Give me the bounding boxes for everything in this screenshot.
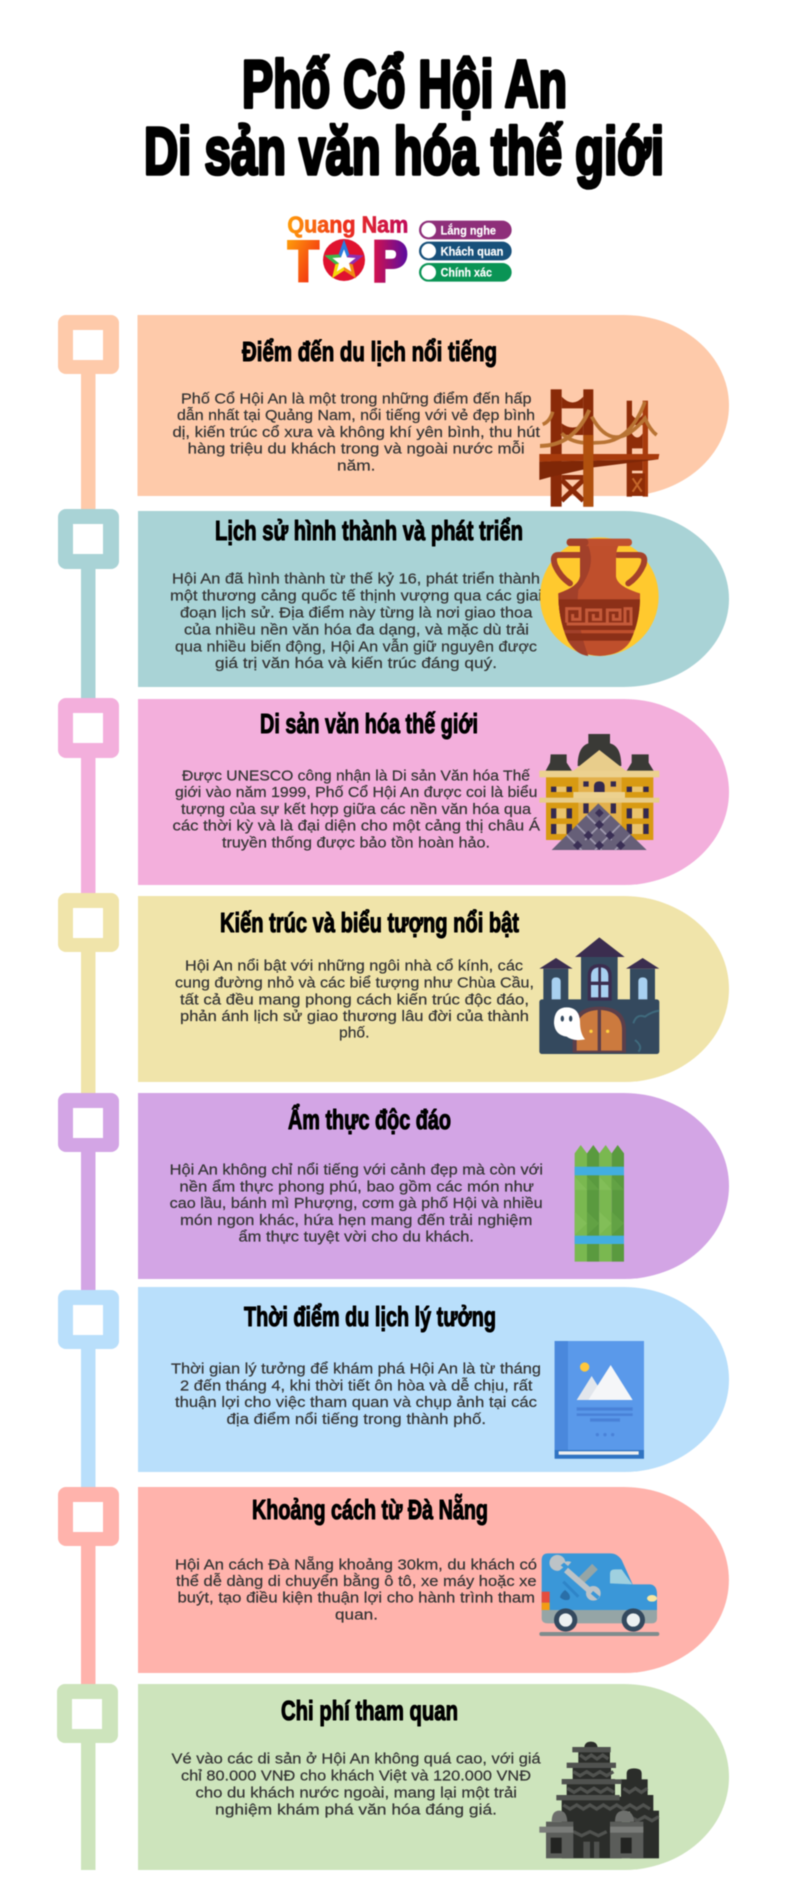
timeline node 4 <box>58 893 119 1096</box>
text block: dẫn nhất tại Quảng Nam, nổi tiếng với vẻ đẹp bình <box>177 407 535 424</box>
logo: Quang Nam TOP: Quang Nam <box>287 211 408 237</box>
panel: di sản văn hóa thế giới <box>138 699 729 885</box>
text block: qua nhiều biến động, Hội An vẫn giữ nguyên được <box>175 638 538 655</box>
text block: Thời gian lý tưởng để khám phá Hội An là từ tháng <box>171 1360 541 1377</box>
card background <box>138 896 729 1082</box>
text block: địa điểm nổi tiếng trong thành phố. <box>226 1411 486 1428</box>
text block: phản ánh lịch sử giao thương lâu đời của thành <box>180 1008 529 1025</box>
logo: Quang Nam TOP: Khách quan <box>441 244 503 258</box>
card background <box>138 315 729 496</box>
text block: Hội An nổi bật với những ngôi nhà cổ kính, các <box>185 958 524 975</box>
title: Phố Cổ Hội An <box>242 47 567 122</box>
icon: picture book <box>555 1341 644 1459</box>
text block <box>172 767 540 852</box>
heading: Ẩm thực độc đáo <box>288 1104 451 1135</box>
text block: cho du khách nước ngoài, mang lại một trải <box>196 1784 517 1801</box>
panel: chi phí tham quan <box>138 1684 729 1870</box>
text block: Vé vào các di sản ở Hội An không quá cao, với giá <box>172 1751 541 1768</box>
text block: các thời kỳ và là đại diện cho một cảng thị châu Á <box>172 818 540 835</box>
text block: Hội An cách Đà Nẵng khoảng 30km, du khách có <box>175 1556 537 1573</box>
text block: Hội An không chỉ nổi tiếng với cảnh đẹp mà còn với <box>170 1161 543 1178</box>
text block: cao lầu, bánh mì Phượng, cơm gà phố Hội và nhiều <box>170 1195 543 1212</box>
heading: Thời điểm du lịch lý tưởng <box>244 1301 496 1332</box>
timeline node 1 <box>58 315 119 515</box>
timeline node 7 <box>58 1487 119 1687</box>
text block <box>175 1556 537 1624</box>
icon: golden bridge <box>539 389 659 507</box>
heading: Chi phí tham quan <box>281 1695 458 1726</box>
icon: palace with pyramid <box>539 734 659 850</box>
text block: truyền thống được bảo tồn hoàn hảo. <box>222 835 490 852</box>
text block: tất cả đều mang phong cách kiến trúc độc đáo, <box>180 991 529 1008</box>
card background <box>138 1487 729 1673</box>
card background <box>138 699 729 885</box>
text block: cung đường nhỏ và các biể tượng như Chùa Cầu, <box>175 974 534 991</box>
text block: nền ẩm thực phong phú, bao gồm các món như <box>179 1178 534 1195</box>
text block: thuận lợi cho việc tham quan và chụp ảnh tại các <box>175 1394 538 1411</box>
text block: quan. <box>335 1607 378 1624</box>
text block: thể dễ dàng di chuyển bằng ô tô, xe máy hoặc xe <box>176 1573 537 1590</box>
text block: tượng của sự kết hợp giữa các nền văn hóa qua <box>181 801 532 818</box>
logo: Quang Nam TOP: P <box>373 231 407 294</box>
text block: phố. <box>339 1025 370 1042</box>
logo: Quang Nam TOP <box>287 211 512 294</box>
text block: Hội An đã hình thành từ thế kỷ 16, phát triển thành <box>172 570 540 587</box>
text block: của nhiều nền văn hóa đa dạng, và mặc dù trải <box>184 621 529 638</box>
text block <box>170 1161 543 1246</box>
icon: cham temple <box>539 1742 659 1858</box>
text block: Được UNESCO công nhận là Di sản Văn hóa Thế <box>182 767 531 784</box>
timeline node 2 <box>58 509 119 703</box>
timeline node 6 <box>58 1290 119 1490</box>
text block <box>170 570 542 672</box>
timeline node 8 <box>57 1684 118 1870</box>
logo: Quang Nam TOP: Lắng nghe <box>441 222 496 237</box>
text block: giới vào năm 1999, Phố Cổ Hội An được coi là biểu <box>175 784 538 801</box>
icon: ancient vase <box>540 537 659 656</box>
icon: old house with ghost <box>539 937 659 1054</box>
text block: món ngon khác, hứa hẹn mang đến trải nghiệm <box>180 1212 532 1229</box>
card background <box>138 511 729 687</box>
heading: Điểm đến du lịch nổi tiếng <box>242 336 497 367</box>
timeline node 3 <box>58 698 119 897</box>
star <box>324 239 364 278</box>
text block <box>172 390 541 474</box>
panel: kiến trúc và biểu tượng nổi bật <box>138 896 729 1082</box>
text block: nghiệm khám phá văn hóa đáng giá. <box>215 1801 497 1818</box>
text block: đoạn lịch sử. Địa điểm này từng là nơi giao thoa <box>180 604 533 621</box>
text block: Phố Cổ Hội An là một trong những điểm đến hấp <box>181 390 532 407</box>
heading: Lịch sử hình thành và phát triển <box>215 515 523 546</box>
panel: điểm đến du lịch nổi tiếng <box>138 315 729 507</box>
heading: Di sản văn hóa thế giới <box>260 708 478 739</box>
panel: lịch sử hình thành và phát triển <box>138 511 729 687</box>
icon: bamboo bundle <box>575 1145 624 1262</box>
text block: giá trị văn hóa và kiến trúc đáng quý. <box>215 655 497 672</box>
text block <box>175 958 534 1042</box>
card background <box>138 1287 729 1472</box>
title <box>144 47 664 189</box>
logo: Quang Nam TOP: Chính xác <box>441 265 492 279</box>
panel: ẩm thực độc đáo <box>138 1093 729 1279</box>
icon: repair van <box>539 1553 659 1636</box>
text block: năm. <box>337 457 376 474</box>
text block: dị, kiến trúc cổ xưa và không khí yên bình, thu hút <box>172 424 541 441</box>
heading: Kiến trúc và biểu tượng nổi bật <box>220 907 519 938</box>
panel: thời điểm du lịch lý tưởng <box>138 1287 729 1472</box>
card background <box>138 1684 729 1870</box>
text block: một thương cảng quốc tế thịnh vượng qua các giai <box>170 588 542 605</box>
text block: hàng triệu du khách trong và ngoài nước mỗi <box>188 441 525 458</box>
panel: khoảng cách từ đà nẵng <box>138 1487 729 1673</box>
logo: Quang Nam TOP: T <box>288 231 319 294</box>
text block: ẩm thực tuyệt vời cho du khách. <box>238 1229 474 1246</box>
heading: Khoảng cách từ Đà Nẵng <box>252 1493 488 1525</box>
card background <box>138 1093 729 1279</box>
text block <box>172 1751 541 1818</box>
text block <box>171 1360 541 1428</box>
text block: chỉ 80.000 VNĐ cho khách Việt và 120.000 VNĐ <box>181 1768 531 1785</box>
text block: 2 đến tháng 4, khi thời tiết ôn hòa và dễ chịu, rất <box>180 1377 533 1394</box>
text block: buýt, tạo điều kiện thuận lợi cho hành trình tham <box>178 1590 535 1607</box>
timeline node 5 <box>58 1093 119 1293</box>
